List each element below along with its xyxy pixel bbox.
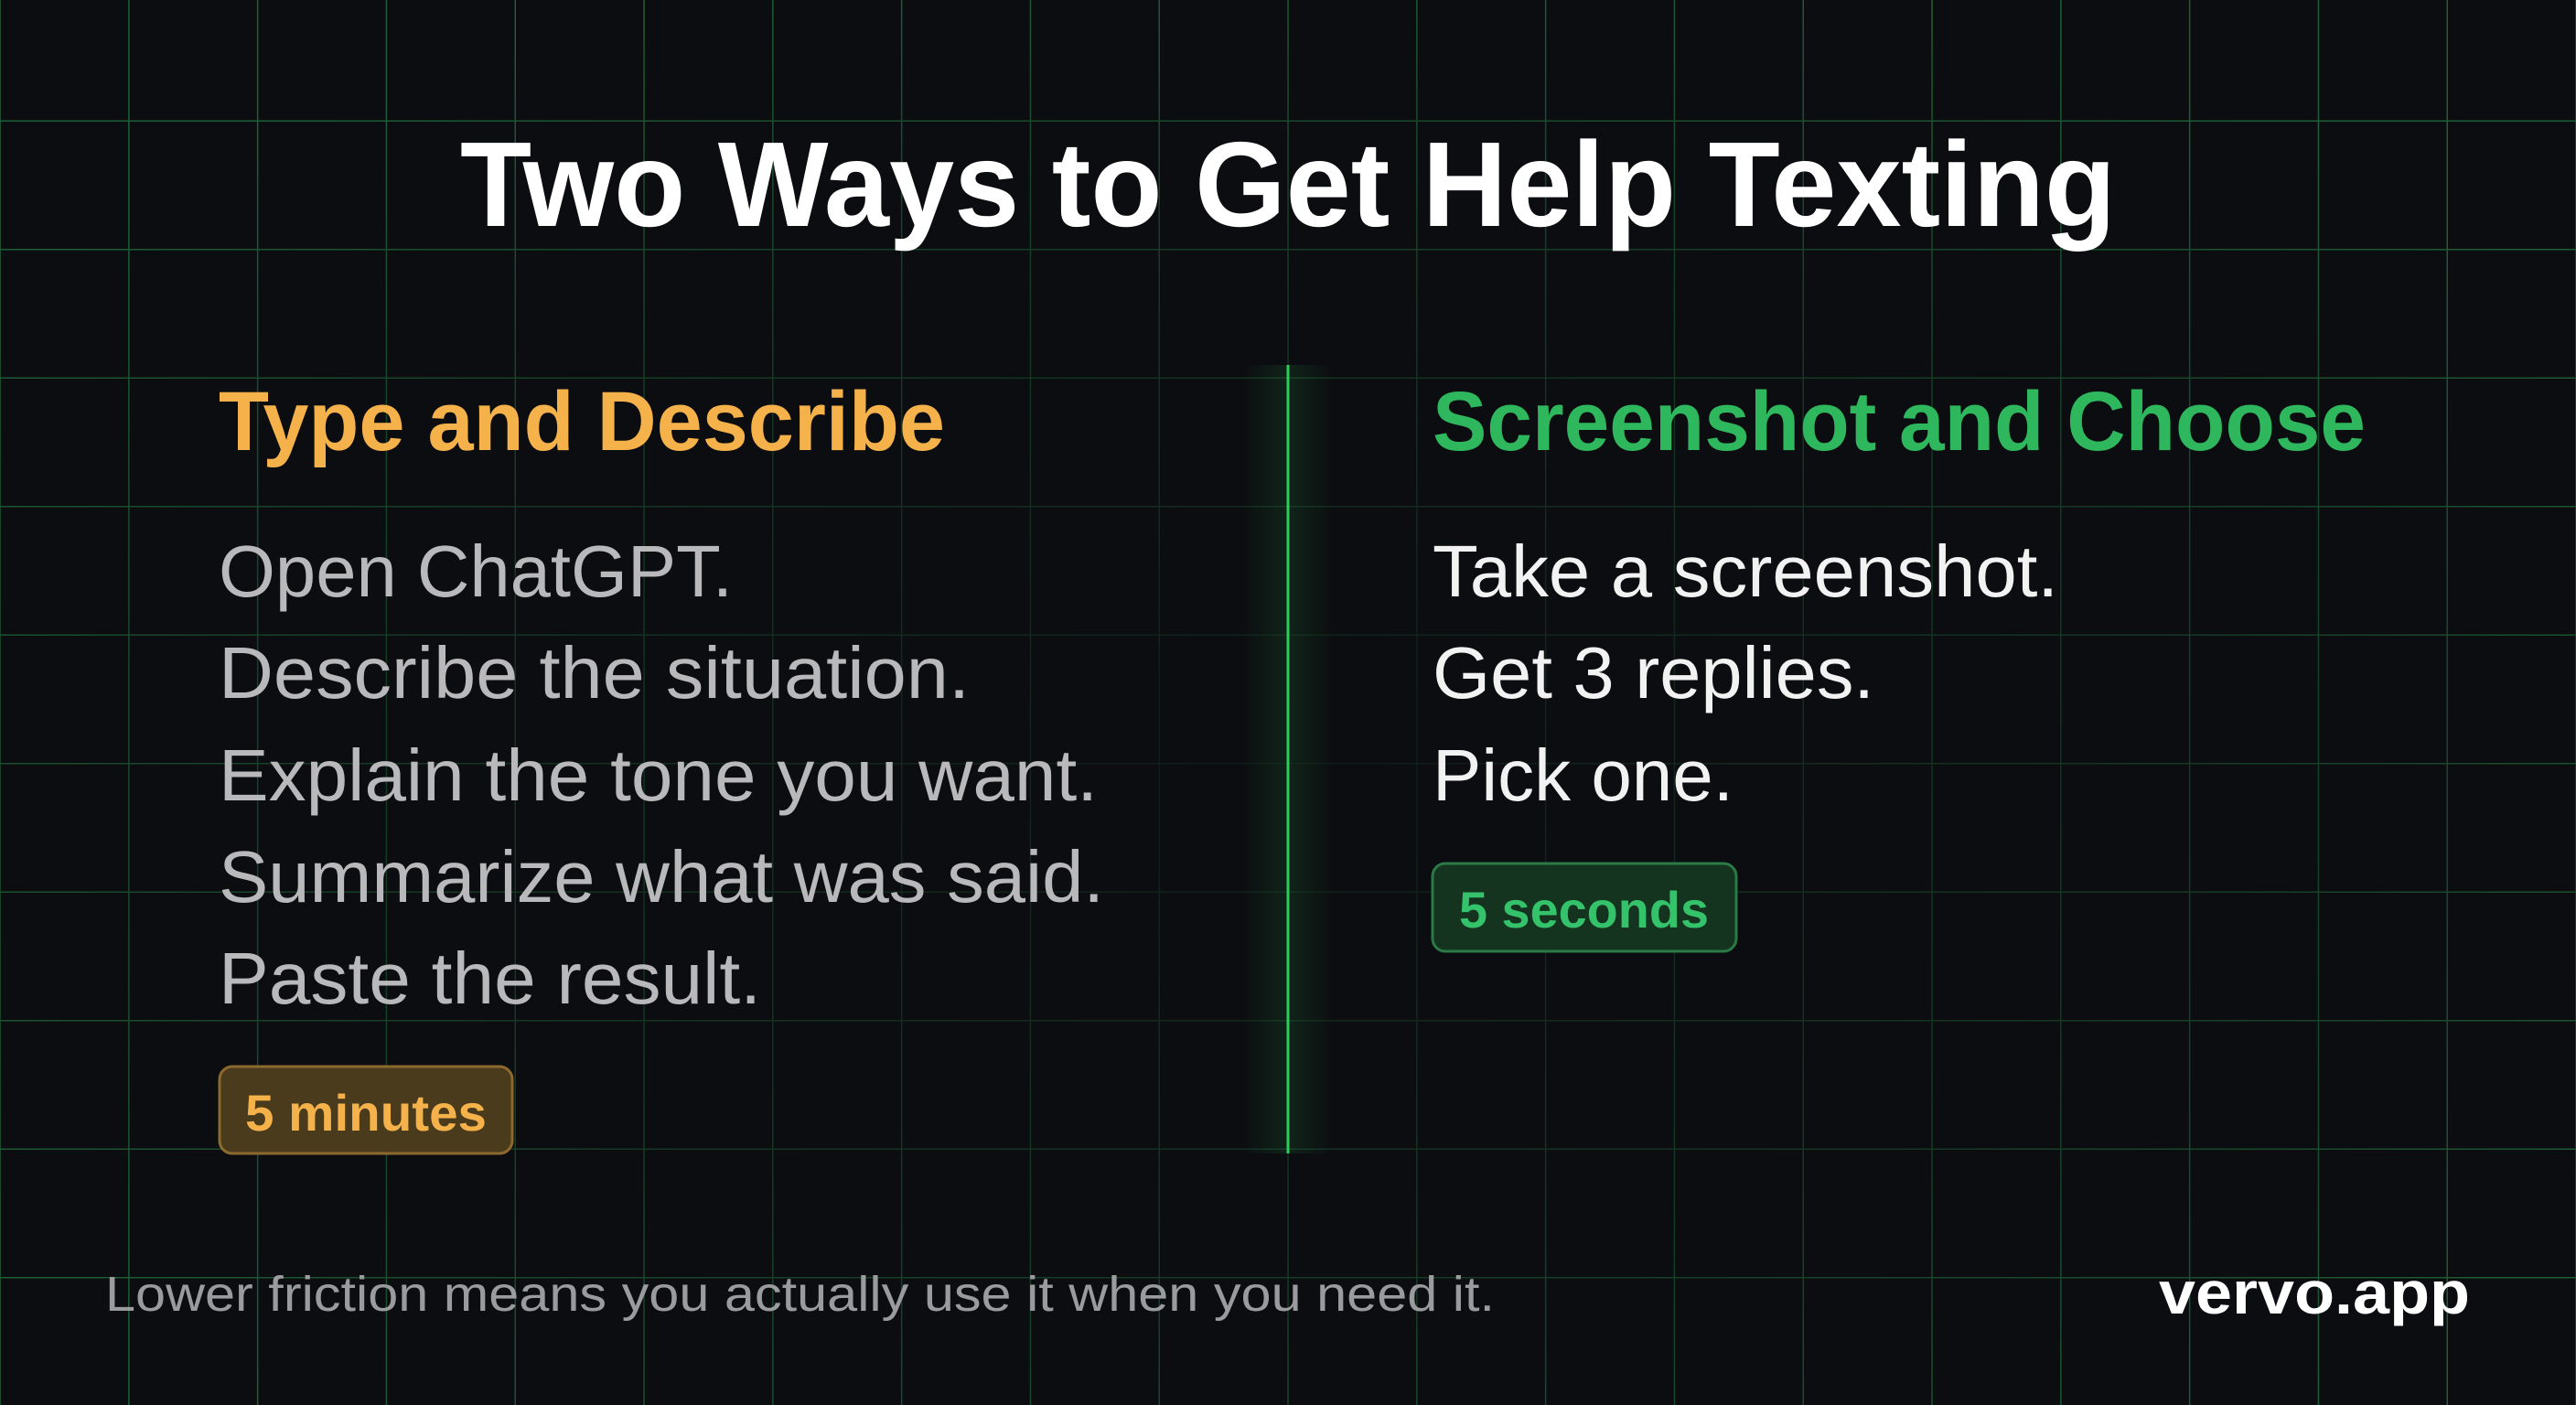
panel: type and describe xyxy=(219,375,1104,1153)
footer tagline: Lower friction means you actually use it when you need it. xyxy=(105,1267,1495,1322)
badge: 5 minutes: 5 minutes xyxy=(245,1084,487,1142)
steps list: right: Take a screenshot. xyxy=(1433,531,2058,612)
heading: type and describe: Type and Describe xyxy=(219,375,945,468)
panel: screenshot and choose xyxy=(1433,375,2366,951)
steps list: right: Pick one. xyxy=(1433,735,1733,816)
footer brand: vervo.app xyxy=(2159,1259,2470,1326)
steps list: left: Open ChatGPT. xyxy=(219,531,733,612)
steps list: left: Summarize what was said. xyxy=(219,836,1104,917)
title: Two Ways to Get Help Texting xyxy=(460,117,2116,252)
steps list: left xyxy=(219,531,1104,1019)
badge: 5 seconds: 5 seconds xyxy=(1459,881,1709,938)
divider xyxy=(1242,365,1334,1153)
steps list: right xyxy=(1433,531,2058,816)
steps list: left: Explain the tone you want. xyxy=(219,735,1098,816)
heading: screenshot and choose: Screenshot and Choose xyxy=(1433,375,2366,468)
steps list: right: Get 3 replies. xyxy=(1433,632,1874,713)
steps list: left: Describe the situation. xyxy=(219,632,970,713)
badge: 5 minutes xyxy=(220,1067,512,1153)
steps list: left: Paste the result. xyxy=(219,938,761,1019)
badge: 5 seconds xyxy=(1433,863,1736,951)
